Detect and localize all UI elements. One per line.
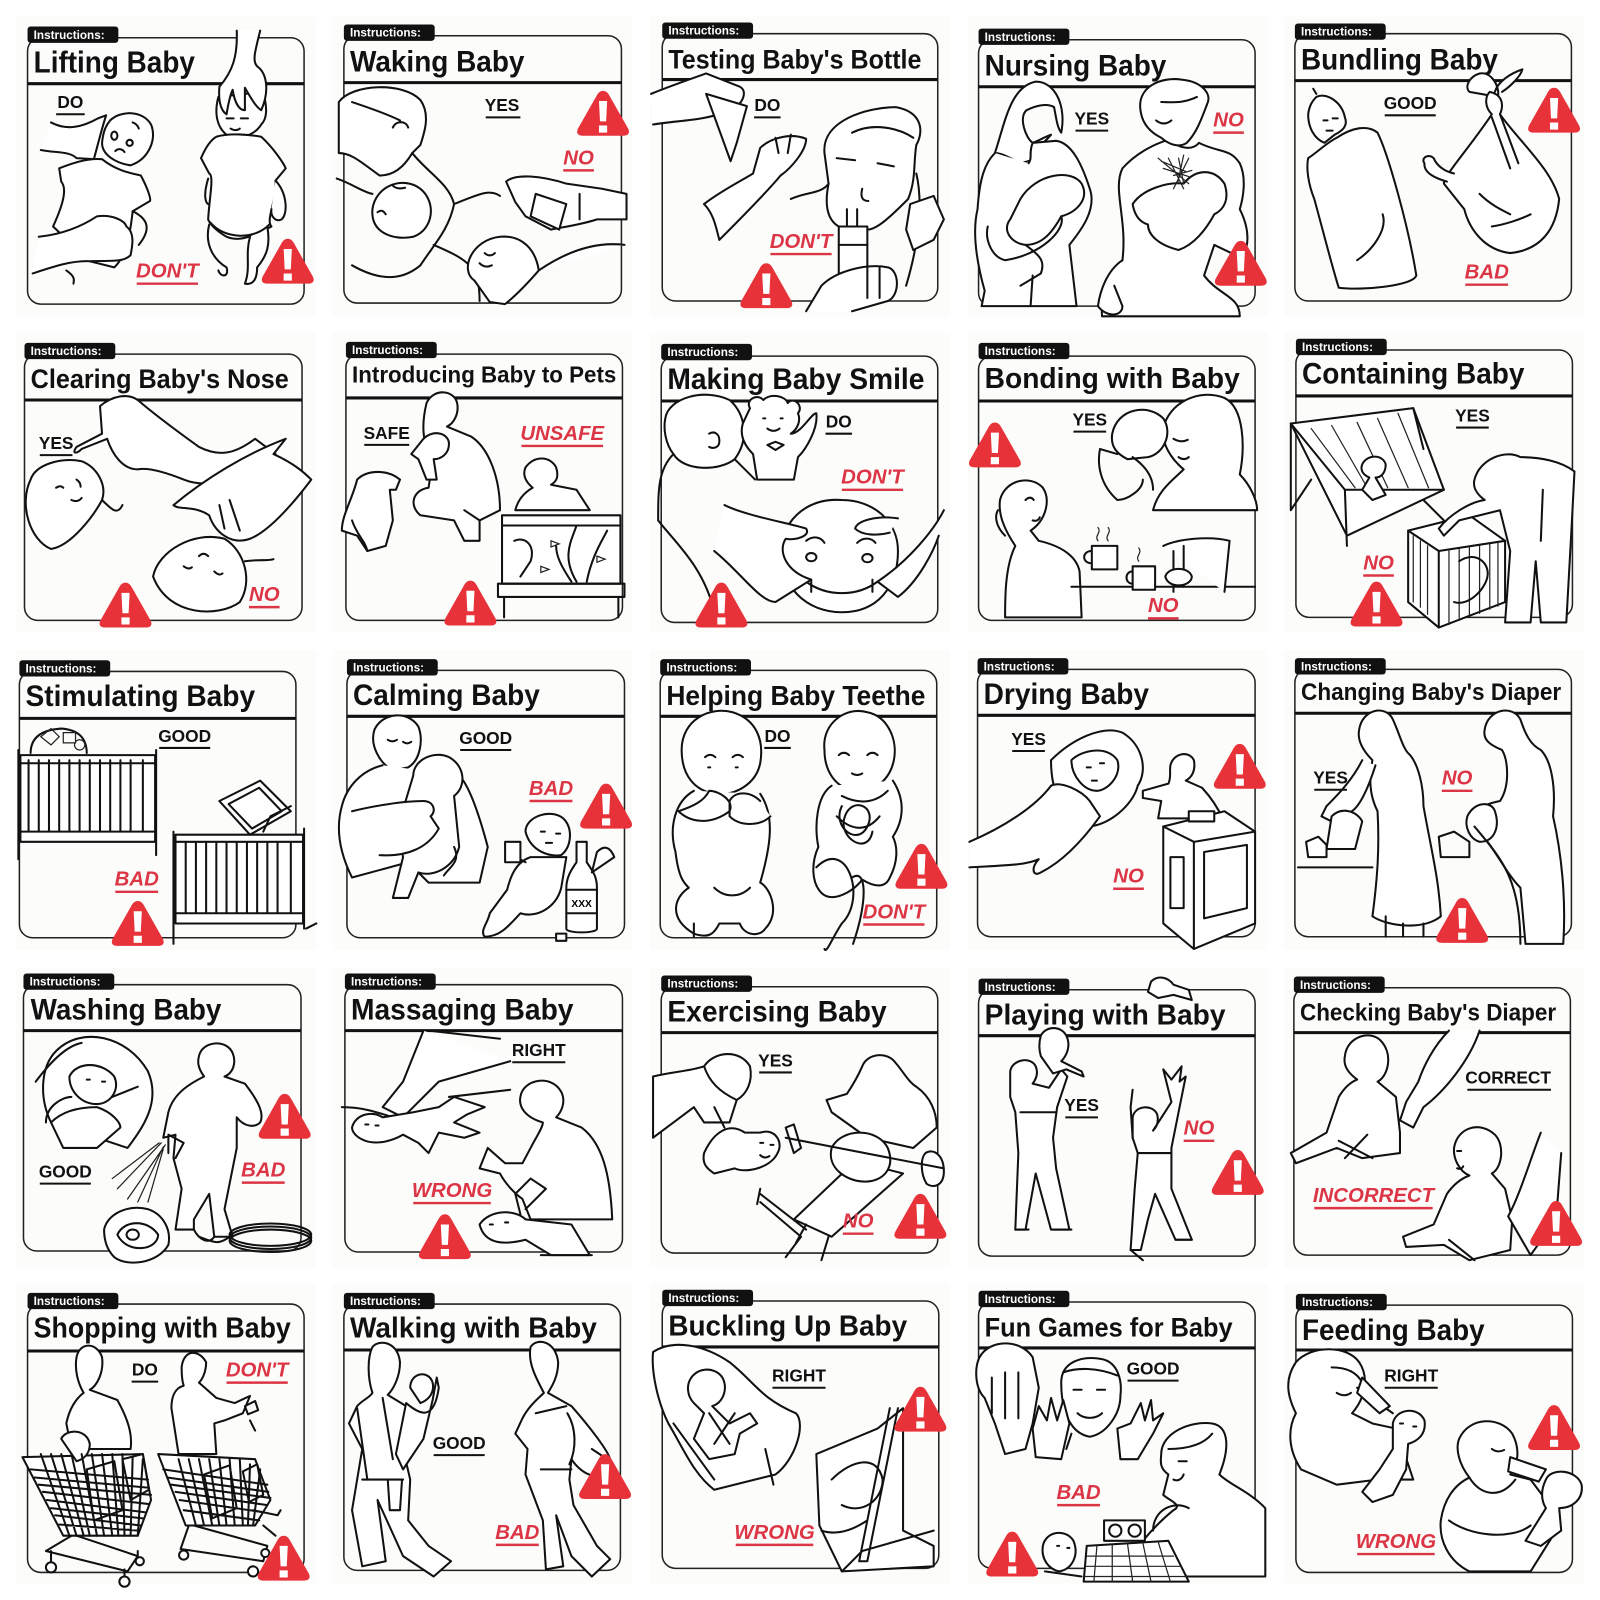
heading: Changing Baby's Diaper: Changing Baby's Diaper	[1301, 679, 1561, 706]
illustration: woman changing on table	[1298, 710, 1441, 937]
label: WRONG: WRONG	[1356, 1531, 1436, 1553]
illustration: mother drinking from bottle with baby	[1441, 1421, 1582, 1571]
illustration: finger in nose	[153, 439, 311, 611]
label: YES: YES	[1064, 1095, 1099, 1115]
illustration: man holding baby	[339, 715, 488, 898]
heading: Exercising Baby: Instructions:	[667, 978, 738, 991]
label: NO: NO	[1213, 110, 1244, 132]
illustration: baby with whiskey bottle	[483, 814, 614, 941]
label: WRONG: WRONG	[734, 1522, 815, 1544]
illustration: man lifting baby	[1010, 1028, 1084, 1230]
panel: Playing with Baby	[967, 967, 1267, 1267]
heading: Testing Baby's Bottle: Instructions:	[668, 25, 739, 38]
panel: Checking Baby's Diaper	[1284, 967, 1584, 1267]
label: GOOD: GOOD	[433, 1433, 486, 1453]
illustration: baby held correctly	[33, 113, 153, 284]
panel: Fun Games for Baby	[967, 1284, 1267, 1584]
label: DO: DO	[826, 412, 852, 432]
label: YES: YES	[1074, 108, 1109, 128]
illustration: man and aquarium	[498, 459, 624, 617]
panel: Massaging Baby	[333, 967, 633, 1267]
heading: Bundling Baby: Bundling Baby	[1301, 43, 1498, 76]
heading: Buckling Up Baby: Buckling Up Baby	[668, 1311, 907, 1343]
illustration: swaddled baby	[1307, 89, 1416, 289]
panel: Lifting Baby	[16, 16, 316, 316]
panel: Shopping with Baby	[16, 1284, 316, 1587]
heading: Changing Baby's Diaper: Instructions:	[1301, 660, 1372, 673]
heading: Lifting Baby	[28, 27, 195, 79]
heading: Lifting Baby: Lifting Baby	[34, 45, 195, 79]
heading: Helping Baby Teethe: Instructions:	[666, 661, 737, 674]
heading: Walking with Baby	[344, 1293, 597, 1345]
illustration: baby and nose to diaper	[1403, 1127, 1561, 1260]
illustration: baby lifted by head	[201, 31, 286, 284]
heading: Introducing Baby to Pets: Instructions:	[352, 344, 423, 357]
label: UNSAFE: UNSAFE	[520, 423, 606, 445]
illustration: woman using skirt as diaper	[1439, 710, 1564, 944]
illustration: woman hosing baby in tub	[104, 1043, 311, 1263]
heading: Clearing Baby's Nose	[24, 343, 289, 394]
illustration: baby with whiskey bottle: XXX	[571, 899, 592, 910]
panel: Calming Baby	[333, 650, 633, 950]
heading: Introducing Baby to Pets	[346, 342, 616, 388]
illustration: kiss awake	[337, 87, 500, 301]
illustration: stretching baby's mouth	[714, 500, 944, 612]
heading: Exercising Baby	[661, 976, 887, 1028]
label: RIGHT: RIGHT	[772, 1366, 826, 1386]
panel: Containing Baby	[1284, 333, 1584, 633]
illustration: hand checking diaper	[1291, 1031, 1480, 1163]
warning triangle	[1528, 88, 1580, 133]
heading: Containing Baby	[1296, 339, 1525, 391]
heading: Making Baby Smile	[661, 344, 924, 396]
label: CORRECT: CORRECT	[1465, 1068, 1551, 1088]
label: BAD: BAD	[1056, 1482, 1101, 1504]
illustration: man at dryer	[1143, 754, 1255, 949]
heading: Exercising Baby: Exercising Baby	[667, 995, 887, 1028]
heading: Massaging Baby	[345, 973, 574, 1026]
label: GOOD: GOOD	[158, 726, 211, 746]
warning triangle	[580, 784, 632, 829]
heading: Helping Baby Teethe: Helping Baby Teethe	[666, 680, 926, 711]
illustration: baby in car seat	[653, 1345, 800, 1490]
panel: Nursing Baby	[967, 16, 1267, 316]
heading: Testing Baby's Bottle	[662, 22, 921, 74]
heading: Playing with Baby: Playing with Baby	[985, 999, 1226, 1031]
heading: Playing with Baby: Instructions:	[985, 981, 1056, 994]
illustration: baby in tied bag	[1423, 69, 1559, 253]
label: DON'T: DON'T	[770, 231, 834, 253]
illustration: crib with mobile	[18, 729, 156, 859]
heading: Testing Baby's Bottle: Testing Baby's Bottle	[668, 44, 921, 74]
label: DON'T: DON'T	[226, 1360, 290, 1382]
illustration: peekaboo man	[976, 1343, 1163, 1459]
warning triangle	[740, 263, 792, 308]
heading: Waking Baby	[344, 24, 525, 78]
label: DON'T: DON'T	[863, 901, 927, 923]
illustration: mother feeding baby upright	[1288, 1349, 1425, 1502]
heading: Massaging Baby: Massaging Baby	[351, 993, 574, 1026]
heading: Walking with Baby: Walking with Baby	[350, 1313, 597, 1345]
heading: Drying Baby: Drying Baby	[984, 678, 1149, 711]
heading: Washing Baby	[23, 973, 222, 1026]
warning triangle	[259, 1094, 311, 1139]
heading: Introducing Baby to Pets: Introducing Baby to Pets	[352, 362, 616, 388]
heading: Stimulating Baby: Stimulating Baby	[26, 680, 256, 713]
label: DO: DO	[57, 92, 83, 112]
heading: Bonding with Baby: Instructions:	[985, 345, 1056, 358]
illustration: woman and baby in cage	[1408, 454, 1574, 628]
illustration: gentle leg exercise	[653, 1054, 780, 1173]
warning triangle	[1528, 1405, 1580, 1450]
illustration: woman with coffee and baby in mug	[996, 480, 1255, 617]
panel: Exercising Baby	[650, 967, 950, 1267]
label: RIGHT: RIGHT	[1384, 1366, 1439, 1386]
heading: Calming Baby: Calming Baby	[353, 679, 540, 712]
panel: Bundling Baby	[1284, 16, 1584, 316]
label: NO: NO	[1113, 866, 1144, 888]
panel: Walking with Baby	[333, 1284, 633, 1584]
illustration: crib with television	[173, 781, 316, 944]
label: GOOD: GOOD	[459, 728, 512, 748]
warning triangle	[1436, 898, 1488, 943]
illustration: hands on baby	[342, 1031, 510, 1153]
label: DON'T: DON'T	[136, 261, 200, 283]
heading: Clearing Baby's Nose: Clearing Baby's Nose	[31, 364, 289, 394]
warning triangle	[258, 1536, 310, 1581]
heading: Buckling Up Baby: Instructions:	[668, 1292, 739, 1305]
heading: Bundling Baby: Instructions:	[1301, 26, 1372, 39]
panel: Clearing Baby's Nose	[16, 333, 316, 633]
heading: Nursing Baby: Nursing Baby	[985, 50, 1167, 83]
illustration: baby tossed high	[1148, 978, 1192, 1000]
label: YES: YES	[485, 95, 519, 115]
illustration: baby bench press	[757, 1055, 944, 1260]
illustration: towel-wrapped baby and hand	[969, 730, 1143, 874]
heading: Making Baby Smile: Instructions:	[667, 346, 738, 359]
panel: Making Baby Smile	[650, 333, 950, 633]
heading: Clearing Baby's Nose: Instructions:	[31, 345, 102, 358]
label: DO: DO	[754, 95, 780, 115]
label: BAD: BAD	[495, 1522, 540, 1544]
label: DO: DO	[765, 726, 791, 746]
heading: Washing Baby: Washing Baby	[31, 993, 222, 1026]
heading: Lifting Baby: Instructions:	[34, 29, 105, 42]
heading: Helping Baby Teethe	[660, 659, 926, 711]
label: YES: YES	[1011, 729, 1046, 749]
warning triangle	[894, 1387, 946, 1432]
label: WRONG: WRONG	[412, 1180, 492, 1202]
label: YES: YES	[39, 433, 73, 453]
illustration: man with front baby carrier	[349, 1343, 451, 1577]
panel: Buckling Up Baby	[650, 1284, 950, 1584]
warning triangle	[1212, 1150, 1264, 1195]
illustration: spray hand and sleeping baby	[468, 176, 627, 304]
label: BAD: BAD	[529, 778, 573, 800]
heading: Stimulating Baby	[19, 660, 256, 713]
heading: Waking Baby: Instructions:	[350, 27, 421, 40]
heading: Waking Baby: Waking Baby	[350, 45, 525, 78]
illustration: gentle bath	[36, 1037, 153, 1148]
heading: Feeding Baby: Instructions:	[1302, 1296, 1373, 1309]
label: RIGHT: RIGHT	[512, 1040, 566, 1060]
heading: Changing Baby's Diaper	[1295, 658, 1561, 706]
label: NO: NO	[1363, 552, 1394, 574]
illustration: woman wrong massage	[480, 1081, 612, 1255]
heading: Massaging Baby: Instructions:	[351, 976, 422, 989]
label: NO: NO	[1184, 1118, 1214, 1140]
heading: Checking Baby's Diaper	[1294, 977, 1557, 1026]
illustration: bottle on wrist	[651, 73, 806, 240]
label: YES: YES	[1072, 410, 1107, 430]
warning triangle	[577, 91, 629, 136]
warning triangle	[444, 581, 496, 626]
heading: Containing Baby: Containing Baby	[1302, 358, 1525, 391]
illustration: playpen with baby	[1291, 408, 1444, 546]
heading: Containing Baby: Instructions:	[1302, 341, 1373, 354]
warning triangle	[419, 1214, 471, 1259]
heading: Stimulating Baby: Instructions:	[26, 662, 96, 675]
warning triangle	[894, 1194, 946, 1239]
illustration: man with backpack	[515, 1342, 610, 1577]
illustration: baby with shoelaces	[813, 711, 902, 950]
heading: Nursing Baby: Instructions:	[985, 31, 1056, 44]
panel: Stimulating Baby	[16, 650, 316, 950]
heading: Drying Baby: Instructions:	[984, 660, 1055, 673]
label: NO: NO	[563, 147, 594, 169]
label: GOOD: GOOD	[1127, 1358, 1180, 1378]
label: INCORRECT: INCORRECT	[1313, 1185, 1436, 1207]
illustration: mother nursing	[975, 82, 1092, 306]
label: BAD: BAD	[115, 869, 159, 891]
heading: Checking Baby's Diaper: Checking Baby's Diaper	[1300, 999, 1557, 1026]
illustration: nasal aspirator	[26, 396, 276, 549]
warning triangle	[969, 422, 1021, 467]
heading: Washing Baby: Instructions:	[30, 976, 101, 989]
warning triangle	[100, 583, 151, 628]
warning triangle	[1214, 744, 1266, 789]
heading: Checking Baby's Diaper: Instructions:	[1300, 979, 1371, 992]
label: NO: NO	[249, 584, 280, 606]
heading: Drying Baby	[978, 658, 1149, 711]
illustration: man throwing baby	[1131, 1066, 1192, 1260]
warning triangle	[262, 239, 314, 284]
panel: Drying Baby	[967, 650, 1267, 950]
heading: Walking with Baby: Instructions:	[350, 1295, 421, 1308]
label: BAD: BAD	[1465, 262, 1509, 284]
label: BAD: BAD	[241, 1160, 286, 1182]
illustration: cart with baby in seat	[22, 1346, 151, 1587]
illustration: father attempting nursing	[1098, 79, 1247, 316]
heading: Fun Games for Baby: Fun Games for Baby	[985, 1313, 1233, 1343]
panel: Bonding with Baby	[967, 333, 1267, 633]
label: DON'T: DON'T	[841, 467, 905, 489]
warning triangle	[1215, 241, 1267, 286]
illustration: man playing chess with baby	[1043, 1423, 1265, 1582]
warning triangle	[579, 1454, 631, 1499]
panel: Introducing Baby to Pets	[333, 333, 633, 633]
panel: Waking Baby	[333, 16, 633, 316]
panel: Changing Baby's Diaper	[1284, 650, 1584, 950]
heading: Making Baby Smile: Making Baby Smile	[667, 363, 924, 396]
illustration: man kneeling with baby and dog	[342, 392, 500, 551]
panel: Testing Baby's Bottle	[650, 16, 950, 316]
heading: Fun Games for Baby: Instructions:	[985, 1293, 1056, 1306]
label: GOOD: GOOD	[1384, 93, 1437, 113]
heading: Bundling Baby	[1295, 23, 1498, 76]
label: YES: YES	[1313, 768, 1348, 788]
heading: Bonding with Baby	[979, 343, 1240, 395]
illustration: parent and baby cuddle	[1099, 395, 1257, 510]
heading: Shopping with Baby: Instructions:	[34, 1295, 105, 1308]
warning triangle	[1530, 1201, 1582, 1246]
heading: Bonding with Baby: Bonding with Baby	[985, 363, 1240, 395]
panel: Feeding Baby	[1284, 1284, 1584, 1584]
label: YES: YES	[758, 1050, 793, 1070]
warning triangle	[986, 1532, 1038, 1577]
illustration: overfilled cart, baby buried	[158, 1353, 281, 1577]
label: DO: DO	[132, 1359, 158, 1379]
label: NO: NO	[843, 1211, 874, 1233]
heading: Playing with Baby	[979, 979, 1226, 1031]
heading: Buckling Up Baby	[662, 1290, 907, 1343]
heading: Calming Baby: Instructions:	[353, 661, 424, 674]
illustration: man drinking from bottle	[791, 107, 944, 311]
label: SAFE: SAFE	[364, 423, 410, 443]
heading: Feeding Baby: Feeding Baby	[1302, 1314, 1485, 1347]
warning triangle	[112, 901, 164, 946]
illustration: baby with teething ring	[673, 711, 773, 937]
heading: Fun Games for Baby	[979, 1291, 1233, 1343]
warning triangle	[695, 583, 747, 628]
heading: Shopping with Baby: Shopping with Baby	[34, 1313, 291, 1345]
heading: Shopping with Baby	[28, 1293, 291, 1345]
warning triangle	[895, 844, 947, 889]
label: GOOD: GOOD	[39, 1162, 92, 1182]
label: YES: YES	[1455, 405, 1490, 425]
heading: Calming Baby	[347, 659, 540, 712]
label: NO: NO	[1148, 595, 1179, 617]
panel: Helping Baby Teethe	[650, 650, 950, 950]
panel: Washing Baby	[16, 967, 316, 1267]
label: NO: NO	[1442, 768, 1473, 790]
illustration: baby buckled with belt wrong	[816, 1408, 934, 1571]
warning triangle	[1351, 582, 1402, 627]
heading: Feeding Baby	[1296, 1294, 1485, 1347]
illustration: baby and hand puppet	[658, 395, 817, 612]
heading: Nursing Baby	[979, 29, 1167, 83]
